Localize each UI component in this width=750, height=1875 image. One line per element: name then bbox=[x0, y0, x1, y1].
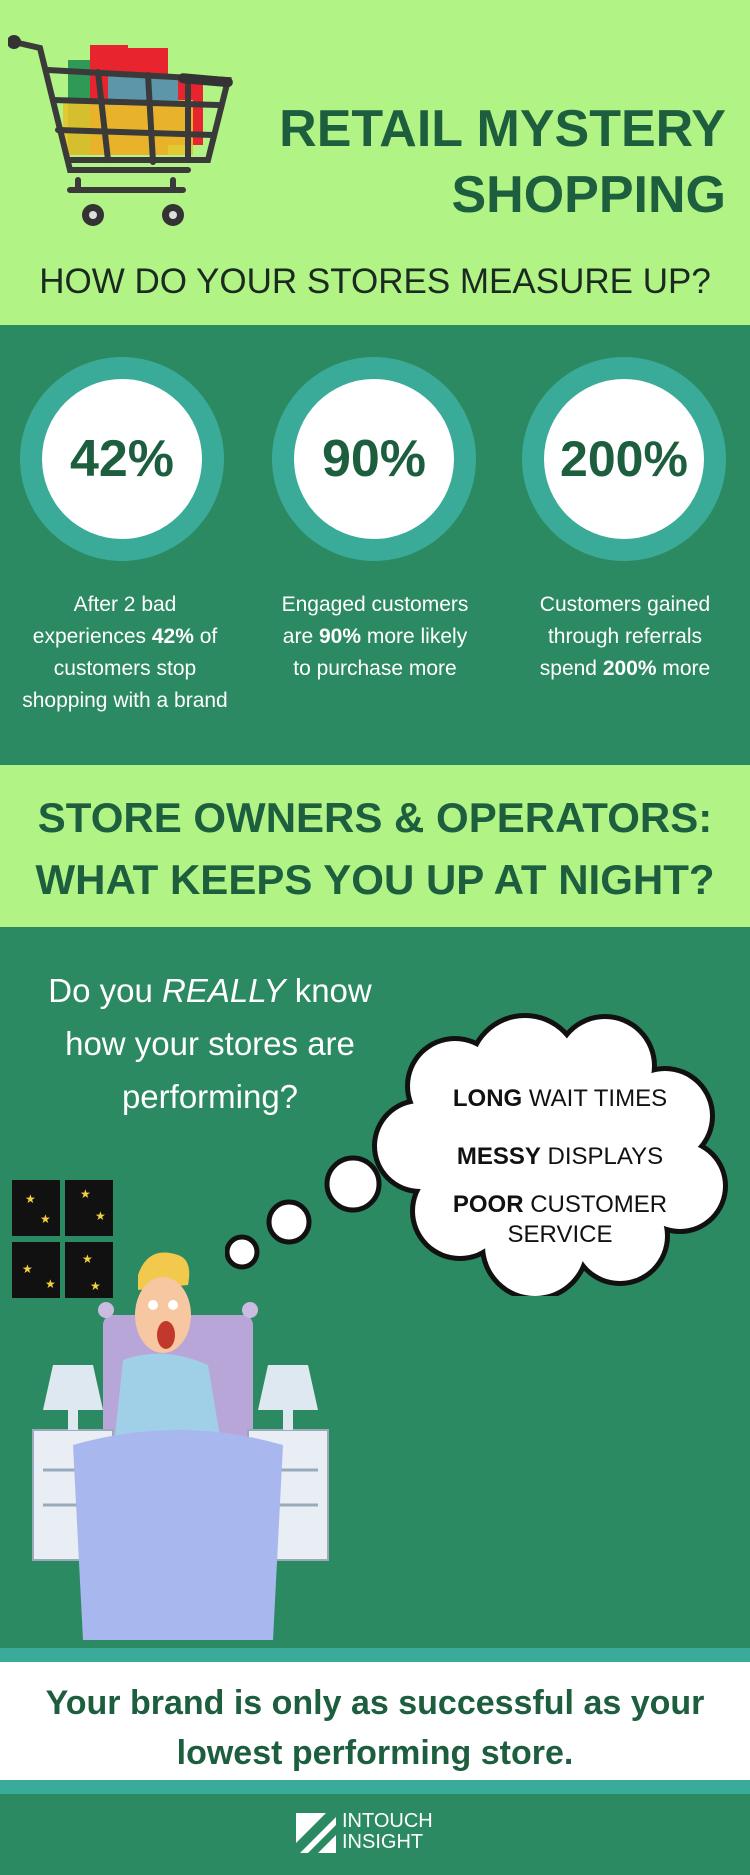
stat 42%: customers stop bbox=[54, 657, 196, 680]
stat 42%: shopping with a brand bbox=[22, 689, 228, 712]
stat 90%: Engaged customers bbox=[282, 593, 468, 616]
teal stripe bbox=[0, 1780, 750, 1794]
stat 42%: experiences 42% of bbox=[33, 625, 217, 648]
closing statement bbox=[0, 1662, 750, 1780]
subtitle: HOW DO YOUR STORES MEASURE UP? bbox=[39, 262, 711, 301]
icon: night windows: ★ bbox=[82, 1252, 93, 1266]
logo: Intouch Insight bbox=[296, 1810, 433, 1853]
panel: statistics bbox=[20, 357, 726, 712]
closing statement: lowest performing store. bbox=[177, 1734, 573, 1772]
stat 42% bbox=[20, 357, 228, 712]
logo: Intouch Insight: INTOUCH bbox=[342, 1810, 433, 1832]
cloud text bbox=[453, 1085, 667, 1248]
logo: Intouch Insight: INSIGHT bbox=[342, 1831, 423, 1853]
icon: night windows bbox=[12, 1180, 113, 1298]
icon: night windows: ★ bbox=[95, 1209, 106, 1223]
stat 42%: After 2 bad bbox=[74, 593, 176, 616]
cloud text: POOR CUSTOMER bbox=[453, 1191, 667, 1218]
stat 90% bbox=[272, 357, 476, 680]
heading band: WHAT KEEPS YOU UP AT NIGHT? bbox=[35, 856, 715, 903]
icon: night windows: ★ bbox=[25, 1192, 36, 1206]
stat 200%: 200% bbox=[560, 431, 688, 487]
stat 42%: 42% bbox=[70, 430, 174, 488]
icon: shopping cart bbox=[8, 35, 233, 226]
stat 90%: 90% bbox=[322, 430, 426, 488]
heading band: STORE OWNERS & OPERATORS: bbox=[38, 794, 712, 841]
question text: Do you REALLY know how your stores are performing? bbox=[48, 972, 372, 1115]
title: RETAIL MYSTERY bbox=[279, 100, 726, 158]
icon: night windows: ★ bbox=[40, 1212, 51, 1226]
icon: night windows: ★ bbox=[90, 1279, 101, 1293]
heading band bbox=[0, 765, 750, 927]
thought cloud bbox=[225, 1013, 728, 1296]
icon: night windows: ★ bbox=[45, 1277, 56, 1291]
stat 90%: to purchase more bbox=[293, 657, 457, 680]
cloud text: MESSY DISPLAYS bbox=[457, 1143, 663, 1170]
cloud text: LONG WAIT TIMES bbox=[453, 1085, 667, 1112]
stat 200% bbox=[522, 357, 726, 680]
title bbox=[279, 100, 726, 224]
stat 90%: are 90% more likely bbox=[283, 625, 467, 648]
teal stripe bbox=[0, 1648, 750, 1662]
stat 200%: Customers gained bbox=[540, 593, 710, 616]
illustration: man awake in bed bbox=[32, 1252, 329, 1640]
icon: night windows: ★ bbox=[22, 1262, 33, 1276]
title: SHOPPING bbox=[452, 166, 726, 224]
closing statement: Your brand is only as successful as your bbox=[46, 1684, 704, 1722]
stat 200%: through referrals bbox=[548, 625, 702, 648]
stat 200%: spend 200% more bbox=[540, 657, 710, 680]
header panel bbox=[0, 0, 750, 325]
cloud text: SERVICE bbox=[508, 1221, 612, 1248]
icon: night windows: ★ bbox=[80, 1187, 91, 1201]
